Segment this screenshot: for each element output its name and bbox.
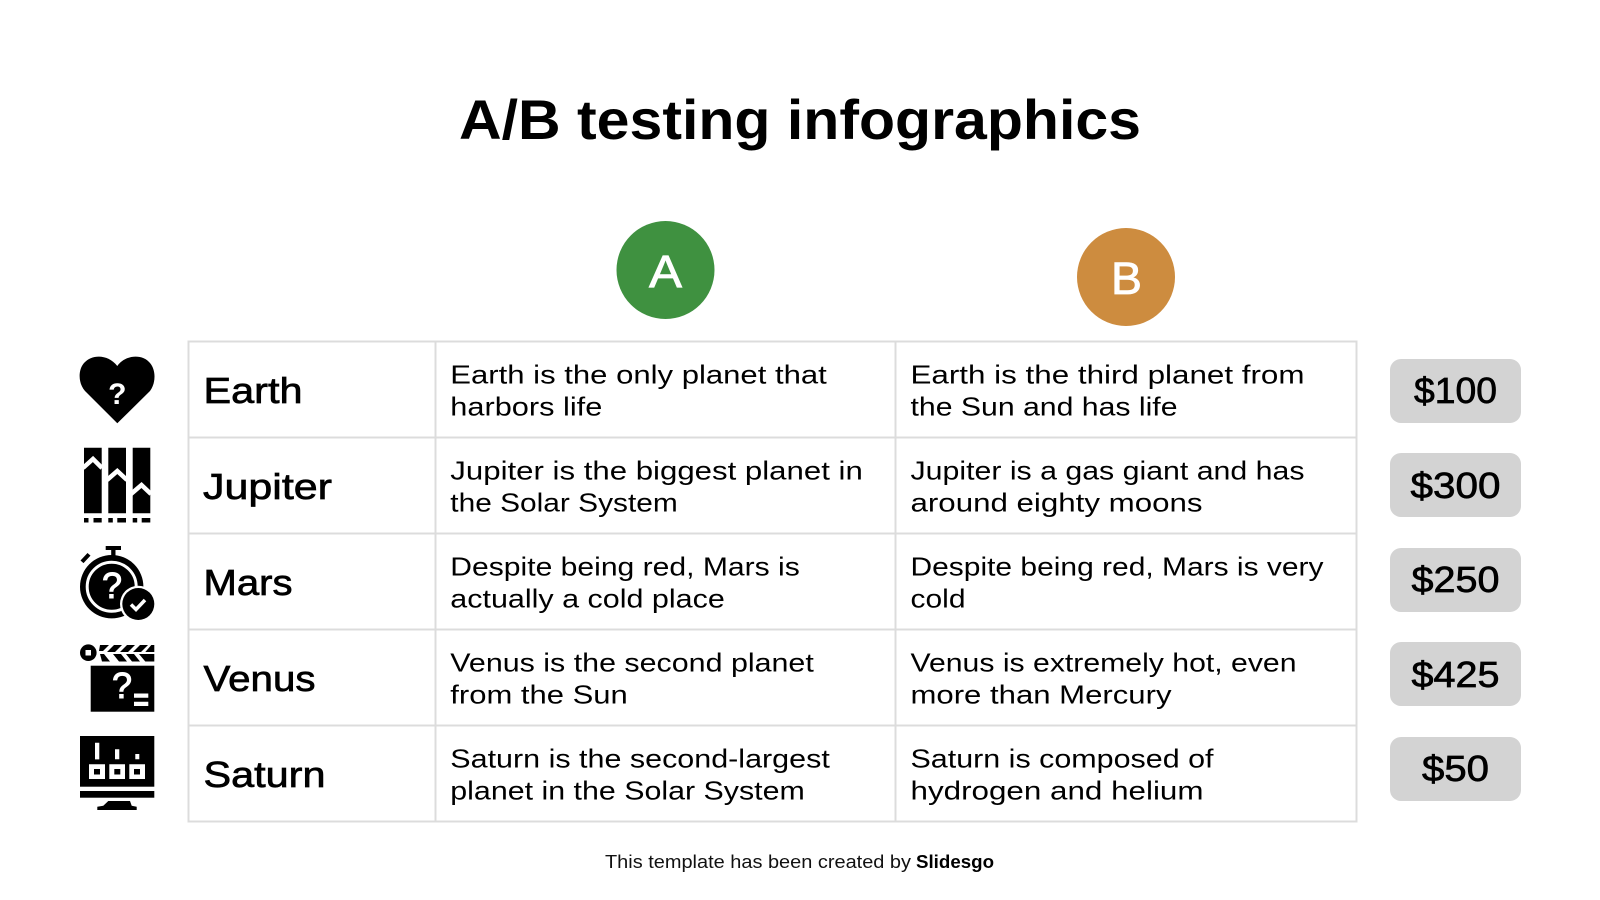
footer credit: Slidesgo <box>916 852 994 872</box>
column A descriptions: harbors life <box>450 392 602 422</box>
column B descriptions: the Sun and has life <box>910 392 1178 422</box>
column A descriptions: from the Sun <box>450 680 628 710</box>
column A descriptions: the Solar System <box>450 488 678 518</box>
column A descriptions: actually a cold place <box>450 584 725 614</box>
column A descriptions: Saturn is the second-largest <box>450 744 831 774</box>
column B descriptions: cold <box>910 584 966 614</box>
icon: monitor with chart <box>80 736 154 810</box>
planet names: Earth <box>204 370 302 411</box>
planet names: Saturn <box>204 754 326 795</box>
icon: bar chart with arrows <box>83 448 151 522</box>
price tags: $300 <box>1410 465 1500 506</box>
planet names: Mars <box>204 562 292 603</box>
badge: B <box>1077 228 1175 326</box>
planet names: Venus <box>204 658 316 699</box>
column A descriptions: Despite being red, Mars is <box>450 552 800 582</box>
column A descriptions <box>450 360 863 806</box>
footer credit: This template has been created by <box>605 852 911 872</box>
column A descriptions: Venus is the second planet <box>450 648 815 678</box>
planet names <box>203 370 332 795</box>
planet names: Jupiter <box>203 466 332 507</box>
icon: heart with question mark <box>80 357 154 423</box>
column A descriptions: Earth is the only planet that <box>450 360 828 390</box>
column B descriptions: Despite being red, Mars is very <box>910 552 1324 582</box>
badge: A <box>616 221 714 319</box>
column B descriptions: Saturn is composed of <box>910 744 1214 774</box>
price tags: $250 <box>1412 559 1500 600</box>
icon: clapperboard with question mark <box>80 644 154 712</box>
column B descriptions: Earth is the third planet from <box>910 360 1304 390</box>
comparison table <box>188 341 1357 822</box>
column B descriptions: hydrogen and helium <box>910 776 1204 806</box>
badge: B: B <box>1111 253 1142 304</box>
badge: A: A <box>649 246 682 297</box>
icon: stopwatch with check <box>80 546 157 622</box>
title: A/B testing infographics <box>459 88 1141 151</box>
column B descriptions: Venus is extremely hot, even <box>910 648 1296 678</box>
column B descriptions: around eighty moons <box>910 488 1202 518</box>
column B descriptions: more than Mercury <box>910 680 1172 710</box>
column A descriptions: planet in the Solar System <box>450 776 805 806</box>
icon: heart with question mark: ? <box>108 378 126 411</box>
price tags <box>1390 359 1521 801</box>
price tags: $425 <box>1412 654 1500 695</box>
price tags: $50 <box>1422 748 1489 789</box>
icon: clapperboard with question mark: ? <box>112 665 132 706</box>
column B descriptions: Jupiter is a gas giant and has <box>910 456 1304 486</box>
column A descriptions: Jupiter is the biggest planet in <box>450 456 863 486</box>
icon: stopwatch with check: ? <box>102 565 122 606</box>
price tags: $100 <box>1414 370 1497 411</box>
column B descriptions <box>910 360 1324 806</box>
